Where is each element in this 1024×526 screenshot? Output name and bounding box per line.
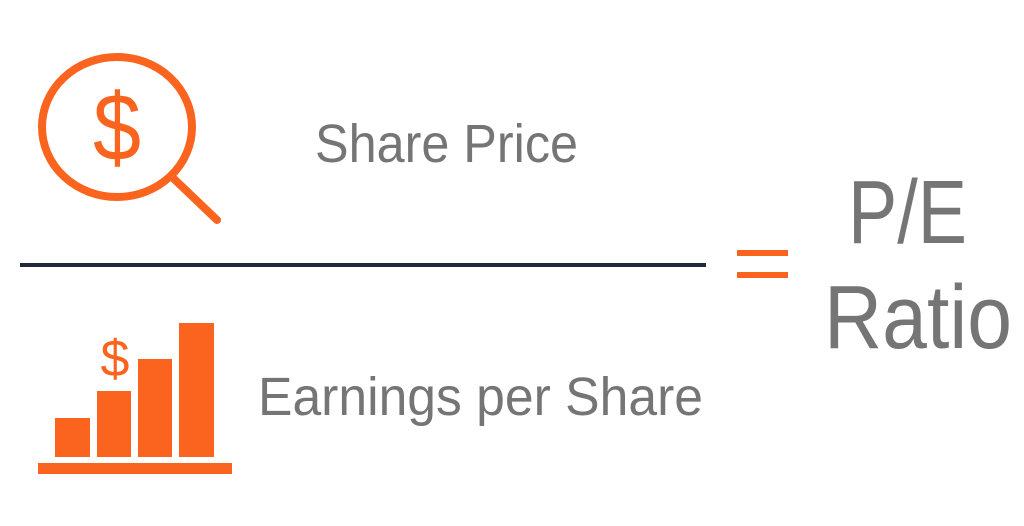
fraction line	[20, 263, 706, 267]
numerator text: Share Price: Share Price	[315, 114, 578, 174]
icon: magnifier with dollar	[42, 57, 217, 220]
icon: magnifier with dollar: $	[93, 74, 141, 181]
icon: bar chart with dollar: $	[101, 330, 130, 388]
equals sign	[737, 250, 788, 278]
result text: P/E Ratio: P/E	[848, 163, 967, 263]
denominator text: Earnings per Share: Earnings per Share	[258, 367, 703, 427]
result text: P/E Ratio	[824, 163, 1012, 368]
icon: bar chart with dollar	[38, 323, 232, 474]
